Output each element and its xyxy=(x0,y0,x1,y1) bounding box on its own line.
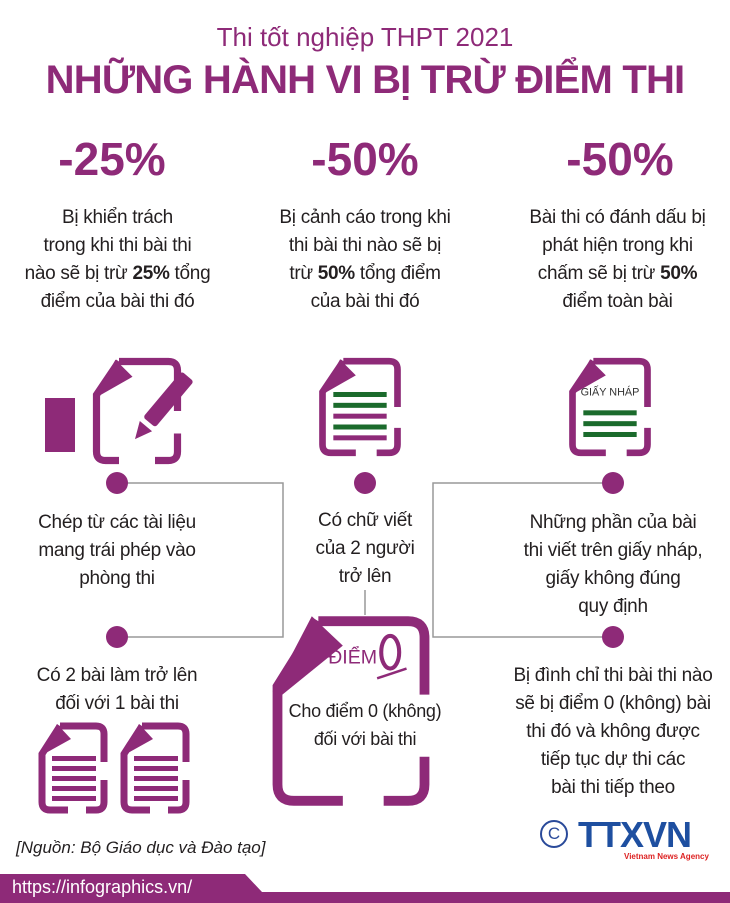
icon: scratch paper document: GIẤY NHÁP xyxy=(581,385,639,398)
text: reprimand: trong khi thi bài thi xyxy=(44,235,191,256)
text: two answers: Có 2 bài làm trở lên xyxy=(37,665,197,686)
footer bar xyxy=(0,874,730,903)
text: warning: trừ 50% tổng điểm xyxy=(289,263,441,284)
text: reprimand: điểm của bài thi đó xyxy=(41,291,194,312)
text: zero score: Cho điểm 0 (không) xyxy=(289,701,441,721)
text: suspension: sẽ bị điểm 0 (không) bài xyxy=(515,693,711,714)
text: marked paper: Bài thi có đánh dấu bị xyxy=(529,207,706,228)
text: copying materials xyxy=(38,512,196,589)
text: warning: của bài thi đó xyxy=(311,291,419,312)
text: scratch paper: giấy không đúng xyxy=(546,568,680,589)
text: two answers xyxy=(37,665,197,714)
icon: center zero-score document xyxy=(272,616,430,806)
text: marked paper xyxy=(529,207,706,312)
text: reprimand: nào sẽ bị trừ 25% tổng xyxy=(25,263,210,284)
percent -50% right: -50% xyxy=(566,133,674,185)
text: warning xyxy=(279,207,451,312)
text: scratch paper: thi viết trên giấy nháp, xyxy=(524,540,702,561)
logo: TTXVN: TTXVN xyxy=(578,814,691,855)
text: suspension: Bị đình chỉ thi bài thi nào xyxy=(514,665,712,686)
text: suspension: bài thi tiếp theo xyxy=(551,777,675,798)
icon: copying (document + pencil) xyxy=(45,358,193,464)
text: two handwritings: Có chữ viết xyxy=(318,510,412,531)
text: marked paper: điểm toàn bài xyxy=(562,291,673,312)
icon: center zero-score document: ĐIỂM xyxy=(328,646,377,669)
text: two answers: đối với 1 bài thi xyxy=(55,693,179,714)
text: scratch paper xyxy=(524,512,702,617)
text: suspension xyxy=(514,665,712,798)
source: [Nguồn: Bộ Giáo dục và Đào tạo] xyxy=(16,838,266,857)
logo: TTXVN xyxy=(540,814,709,861)
logo: TTXVN: Vietnam News Agency xyxy=(624,852,709,861)
text: warning: thi bài thi nào sẽ bị xyxy=(289,235,441,256)
text: two handwritings: trở lên xyxy=(339,566,391,587)
text: copying materials: Chép từ các tài liệu xyxy=(38,512,196,533)
percent -50% middle: -50% xyxy=(311,133,419,185)
icon: two writings document xyxy=(319,358,401,456)
logo: TTXVN: C xyxy=(548,824,560,843)
text: copying materials: phòng thi xyxy=(79,568,155,589)
text: two handwritings xyxy=(316,510,414,587)
text: warning: Bị cảnh cáo trong khi xyxy=(279,207,451,228)
text: marked paper: chấm sẽ bị trừ 50% xyxy=(538,263,697,284)
text: scratch paper: Những phần của bài xyxy=(530,512,696,533)
text: zero score: đối với bài thi xyxy=(314,729,416,749)
text: two handwritings: của 2 người xyxy=(316,538,414,559)
text: marked paper: phát hiện trong khi xyxy=(542,235,693,256)
text: reprimand: Bị khiển trách xyxy=(62,207,173,228)
percent -25%: -25% xyxy=(58,133,166,185)
title: NHỮNG HÀNH VI BỊ TRỪ ĐIỂM THI xyxy=(46,58,684,102)
text: zero score xyxy=(289,701,441,749)
text: suspension: thi đó và không được xyxy=(526,721,700,742)
text: suspension: tiếp tục dự thi các xyxy=(541,749,685,770)
icon: scratch paper document xyxy=(569,358,651,456)
footer bar: https://infographics.vn/ xyxy=(12,877,192,897)
subtitle: Thi tốt nghiệp THPT 2021 xyxy=(217,22,513,52)
text: copying materials: mang trái phép vào xyxy=(38,540,196,561)
text: reprimand xyxy=(25,207,210,312)
text: scratch paper: quy định xyxy=(578,596,648,617)
icon: two documents xyxy=(38,722,190,814)
